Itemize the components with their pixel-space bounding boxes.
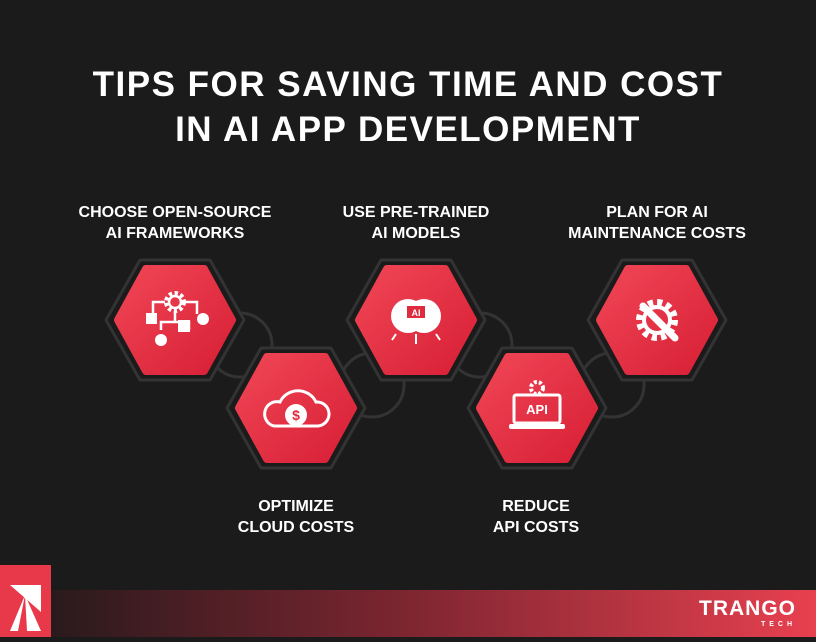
label: pre-trained: USE PRE-TRAINED: [343, 204, 489, 221]
label: maintenance: PLAN FOR AI: [606, 204, 708, 221]
brand: Trango Tech: TECH: [761, 621, 796, 628]
label: api: REDUCE: [502, 498, 570, 515]
label: api: API COSTS: [493, 519, 579, 536]
hex 2: cloud icon: $: [292, 407, 300, 423]
label: maintenance: MAINTENANCE COSTS: [568, 225, 746, 242]
footer bar: [51, 590, 816, 637]
hex 4: API icon: [468, 348, 606, 468]
hex 3: AI brain icon: AI: [412, 308, 420, 318]
label: cloud: CLOUD COSTS: [238, 519, 354, 536]
hex 3: AI brain icon: [347, 260, 485, 380]
label: maintenance: [568, 204, 746, 242]
hex 2: cloud icon: [227, 348, 365, 468]
connectors: [208, 313, 644, 417]
title: TIPS FOR SAVING TIME AND COST: [93, 65, 723, 104]
label: open-source: CHOOSE OPEN-SOURCE: [79, 204, 271, 221]
label: cloud: [238, 498, 354, 536]
label: open-source: [79, 204, 271, 242]
label: cloud: OPTIMIZE: [258, 498, 334, 515]
logo mark: [0, 565, 51, 637]
brand: Trango Tech: TRANGO: [699, 597, 796, 620]
hex 1: frameworks icon: [106, 260, 244, 380]
title: IN AI APP DEVELOPMENT: [175, 110, 641, 149]
label: api: [493, 498, 579, 536]
label: pre-trained: [343, 204, 489, 242]
label: open-source: AI FRAMEWORKS: [106, 225, 244, 242]
title: [93, 65, 723, 149]
hex 5: gear wrench icon: [588, 260, 726, 380]
hex 4: API icon: API: [526, 402, 548, 417]
label: pre-trained: AI MODELS: [372, 225, 460, 242]
